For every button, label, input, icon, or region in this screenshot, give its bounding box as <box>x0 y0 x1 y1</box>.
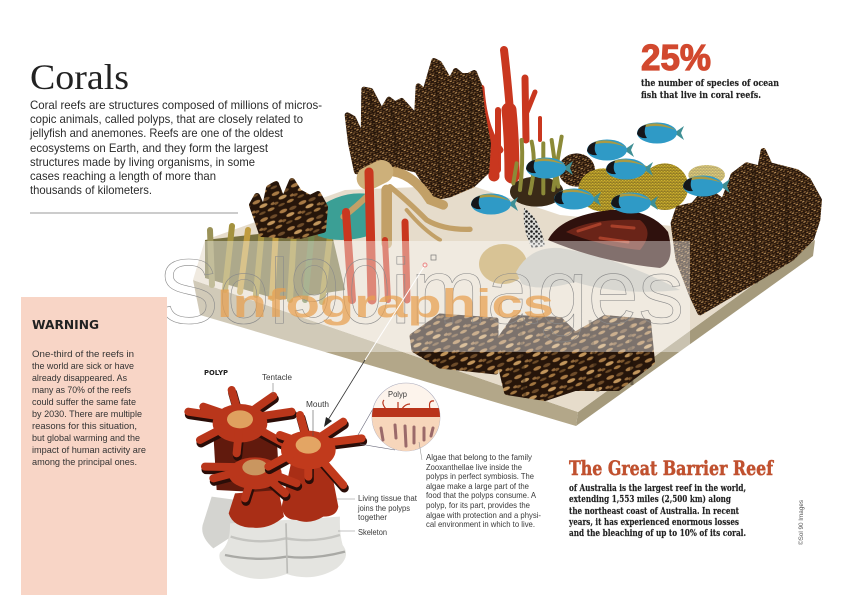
red coral: front <box>346 172 407 300</box>
body: and the bleaching of up to 10% of its coral. <box>569 528 746 539</box>
polyp heading: POLYP <box>204 369 228 377</box>
turtle flipper <box>524 208 545 248</box>
warning text: One-third of the reefs in <box>32 349 134 359</box>
algae text: Zooxanthellae live inside the <box>426 462 522 472</box>
tan sponge <box>479 244 527 284</box>
coral: large right cluster <box>673 151 819 313</box>
circle fill <box>372 383 440 451</box>
teal creature <box>312 193 368 240</box>
stat caption <box>641 78 779 101</box>
intro text: copic animals, called polyps, that are closely related to <box>30 113 303 126</box>
zoom connector lines <box>358 407 395 450</box>
reef illustration <box>193 50 819 426</box>
stat caption: fish that live in coral reefs. <box>641 90 761 101</box>
algae text: polyps in perfect symbiosis. The <box>426 471 534 481</box>
turtle <box>516 208 680 292</box>
great barrier reef block <box>568 457 774 539</box>
title: Corals <box>30 57 129 97</box>
polyp mouth: back <box>227 410 253 428</box>
red coral: back <box>481 50 540 176</box>
label: living tissue <box>357 494 418 522</box>
algae text: algae with protection and a physi- <box>426 510 541 520</box>
warning background <box>21 297 167 595</box>
intro text <box>29 99 322 197</box>
polyp with tentacles: front low <box>205 457 298 501</box>
label: mouth: Mouth <box>306 400 329 409</box>
label: skeleton: Skeleton <box>358 528 387 537</box>
fish school <box>471 122 730 214</box>
reef base: left side <box>193 280 578 426</box>
stat number: 25% <box>641 37 711 78</box>
intro text: Coral reefs are structures composed of millions of micros- <box>30 99 322 112</box>
warning text: impact of human activity are <box>32 445 146 455</box>
warning text: already disappeared. As <box>32 373 127 383</box>
watermark: Infographics: Infographics <box>217 282 554 326</box>
warning text: could suffer the same fate <box>32 397 136 407</box>
label: living tissue: Living tissue that <box>358 494 418 503</box>
intro text: jellyfish and anemones. Reefs are one of the oldest <box>29 127 284 140</box>
polyp with tentacles: back <box>188 390 293 456</box>
magnified polyp circle <box>358 383 440 451</box>
intro text: structures made by living organisms, in some <box>30 156 255 169</box>
label: tentacle: Tentacle <box>262 373 292 382</box>
algae text <box>419 442 541 529</box>
warning text: among the principal ones. <box>32 457 137 467</box>
watermark band <box>152 241 690 352</box>
warning heading: WARNING <box>32 318 99 332</box>
turtle head and neck <box>516 248 680 292</box>
algae text: algae make a large part of the <box>426 481 529 491</box>
warning text: reasons for this situation, <box>32 421 137 431</box>
body: years, it has experienced enormous losses <box>568 517 739 528</box>
polyp body: back <box>213 433 280 493</box>
algae text: Algae that belong to the family <box>426 452 533 462</box>
algae text: cal environment in which to live. <box>426 519 535 529</box>
reef base: right side <box>576 240 815 426</box>
intro text: thousands of kilometers. <box>30 184 152 197</box>
stat: 25 percent <box>641 37 779 101</box>
intro text: ecosystems on Earth, and they form the largest <box>30 142 269 155</box>
polyp with tentacles: right <box>268 415 363 488</box>
body: of Australia is the largest reef in the world, <box>569 483 746 494</box>
coral: large back cluster <box>347 61 488 198</box>
arrow: from reef to polyp <box>324 255 436 427</box>
warning text: the world are sick or have <box>32 361 134 371</box>
seaweed: green cluster <box>510 137 563 207</box>
body: extending 1,553 miles (2,500 km) along <box>569 494 731 505</box>
polyp mouth: low <box>242 459 268 475</box>
body <box>568 483 746 539</box>
credit: ©Sol 90 Images <box>797 499 805 545</box>
watermark: Sol 90 images: Sol90images <box>158 241 684 343</box>
warning text: by 2030. There are multiple <box>32 409 142 419</box>
polyp illustration <box>188 390 363 579</box>
polyp mouth: right <box>296 436 321 454</box>
skeleton <box>202 497 346 579</box>
algae text: food that the polyps consume. A <box>426 490 536 500</box>
polyp diagram <box>188 369 418 579</box>
octopus <box>343 171 470 243</box>
warning text: but global warming and the <box>32 433 140 443</box>
coral: front row <box>412 316 652 398</box>
algae text: polyp, for its part, provides the <box>426 500 530 510</box>
reef base: sand top <box>193 185 815 412</box>
label: polyp in circle: Polyp <box>388 390 408 399</box>
tissue band <box>372 408 440 417</box>
heading: The Great Barrier Reef <box>569 457 774 480</box>
panel: warning <box>21 297 167 595</box>
stat caption: the number of species of ocean <box>641 78 779 89</box>
intro text: cases reaching a length of more than <box>30 170 216 183</box>
label: living tissue: together <box>358 513 387 522</box>
warning text: many as 70% of the reefs <box>32 385 131 395</box>
body: the northeast coast of Australia. In recent <box>569 506 740 517</box>
living tissue <box>282 460 338 522</box>
label: living tissue: joins the polyps <box>357 504 410 513</box>
coral: small left cluster <box>252 181 325 236</box>
warning text <box>32 349 146 467</box>
seaweed: left bed <box>205 226 345 302</box>
yellow coral <box>558 153 725 212</box>
turtle shell <box>548 210 671 268</box>
algae <box>381 425 433 446</box>
circle lower tissue <box>372 417 440 451</box>
